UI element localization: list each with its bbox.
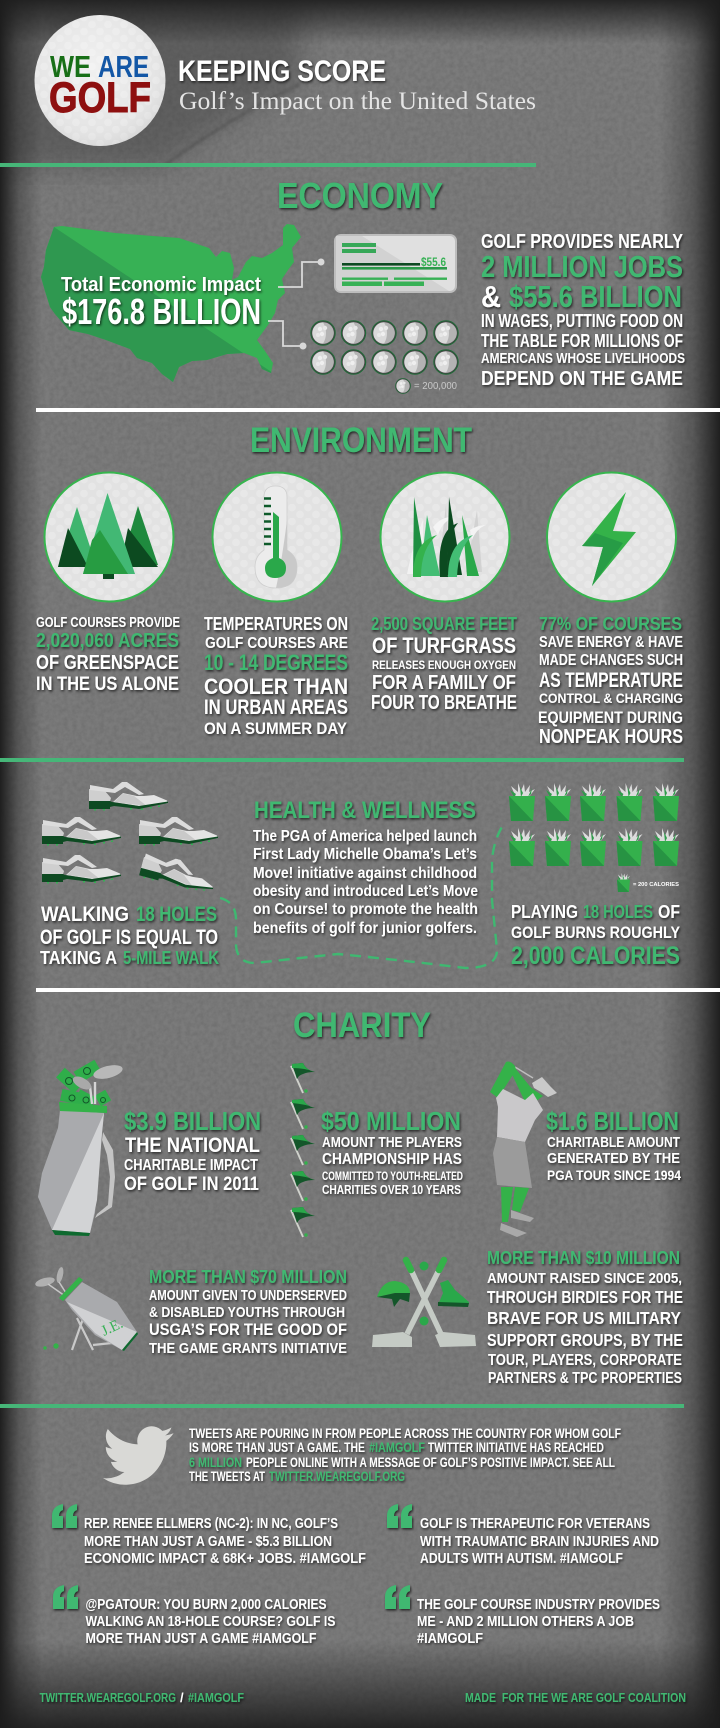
logo: We Are Golf golf ball: GOLF bbox=[49, 74, 151, 122]
icon: paycheck: $55.6 bbox=[421, 255, 446, 269]
icon: pine trees on golf ball bbox=[44, 472, 174, 602]
text block: jobs and wages: $55.6 BILLION bbox=[509, 279, 682, 314]
text block: temperatures: 10 - 14 DEGREES bbox=[204, 650, 348, 675]
text block: let's move: obesity and introduced Let’s Move bbox=[253, 883, 478, 900]
text block: let's move: The PGA of America helped launch bbox=[253, 828, 477, 845]
icon: lightning bolt on golf ball bbox=[547, 472, 676, 602]
text block: 50 million: CHARITIES OVER 10 YEARS bbox=[322, 1183, 461, 1197]
icon: quotation mark 4 bbox=[385, 1585, 410, 1609]
footer: left links: TWITTER.WEAREGOLF.ORG bbox=[40, 1690, 176, 1705]
heading: charity: CHARITY bbox=[293, 1006, 431, 1045]
footer: left links: #IAMGOLF bbox=[188, 1690, 244, 1705]
map: United States with total economic impact: $176.8 BILLION bbox=[62, 291, 261, 332]
icon: golf bag full of money bbox=[38, 1060, 124, 1236]
text block: walking: OF GOLF IS EQUAL TO bbox=[40, 926, 218, 949]
text block: energy savings: SAVE ENERGY & HAVE bbox=[539, 634, 683, 651]
text block: 10 million: BRAVE FOR US MILITARY bbox=[487, 1308, 681, 1328]
text block: energy savings bbox=[538, 614, 683, 748]
panel: environment bbox=[36, 421, 683, 748]
connector dot: paycheck bbox=[318, 258, 324, 266]
heading: economy: ECONOMY bbox=[277, 175, 443, 216]
icon: quotation mark 3 bbox=[53, 1585, 78, 1609]
heading: health and wellness: HEALTH & WELLNESS bbox=[254, 797, 476, 824]
map: United States with total economic impact: Total Economic Impact bbox=[61, 274, 261, 296]
text block: 70 million: AMOUNT GIVEN TO UNDERSERVED bbox=[149, 1287, 347, 1304]
icon group: french fry cups bbox=[509, 783, 679, 866]
text block: tweets intro: 6 MILLION bbox=[189, 1454, 242, 1470]
text block: 3.9 billion: THE NATIONAL bbox=[125, 1134, 260, 1157]
legend: cup equals 200 calories: = 200 CALORIES bbox=[633, 882, 679, 888]
logo: We Are Golf golf ball bbox=[34, 15, 166, 146]
text block: quote veterans bbox=[420, 1516, 659, 1567]
text block: tweets intro: THE TWEETS AT bbox=[189, 1468, 265, 1484]
text block: turfgrass oxygen: 2,500 SQUARE FEET bbox=[371, 614, 517, 634]
icon group: five flags bbox=[291, 1063, 315, 1237]
icon: small golf bag on stand bbox=[34, 1267, 138, 1351]
text block: 70 million: & DISABLED YOUTHS THROUGH bbox=[149, 1304, 345, 1321]
text block: 50 million: COMMITTED TO YOUTH-RELATED bbox=[322, 1171, 463, 1183]
text block: 10 million: PARTNERS & TPC PROPERTIES bbox=[488, 1370, 682, 1387]
text block: tweets intro: TWITTER INITIATIVE HAS REACHED bbox=[428, 1439, 604, 1455]
heading: environment: ENVIRONMENT bbox=[250, 421, 472, 460]
text block: 3.9 billion bbox=[124, 1106, 261, 1195]
text block: temperatures: ON A SUMMER DAY bbox=[204, 719, 348, 738]
text block: let's move: on Course! to promote the health bbox=[253, 901, 478, 918]
text block: temperatures bbox=[204, 614, 348, 738]
text block: 50 million: $50 MILLION bbox=[321, 1106, 461, 1136]
text block: 50 million: CHAMPIONSHIP HAS bbox=[322, 1151, 462, 1168]
text block: walking: 5-MILE WALK bbox=[123, 948, 219, 968]
text block: calories: GOLF BURNS ROUGHLY bbox=[511, 923, 681, 942]
text block: energy savings: CONTROL & CHARGING bbox=[539, 690, 683, 706]
text block: quote veterans: GOLF IS THERAPEUTIC FOR VETERANS bbox=[420, 1516, 650, 1532]
text block: quote Renee Ellmers: ECONOMIC IMPACT & 68K+ JOBS. #IAMGOLF bbox=[84, 1551, 366, 1567]
text block: turfgrass oxygen bbox=[371, 614, 517, 714]
text block: walking bbox=[40, 903, 219, 968]
text block: temperatures: IN URBAN AREAS bbox=[204, 696, 348, 719]
text block: 1.6 billion: $1.6 BILLION bbox=[546, 1106, 679, 1136]
text block: 3.9 billion: $3.9 BILLION bbox=[124, 1106, 261, 1136]
legend: ball equals 200,000: = 200,000 bbox=[414, 381, 457, 392]
text block: let's move: benefits of golf for junior golfers. bbox=[253, 920, 477, 937]
text block: quote golf course industry: ME - AND 2 MILLION OTHERS A JOB bbox=[417, 1614, 634, 1630]
text block: walking: 18 HOLES bbox=[136, 903, 217, 926]
icon: small golf bag on stand: J.E. bbox=[99, 1316, 126, 1340]
text block: 10 million: AMOUNT RAISED SINCE 2005, bbox=[487, 1270, 682, 1287]
map: United States with total economic impact bbox=[30, 224, 301, 390]
text block: quote veterans: ADULTS WITH AUTISM. #IAMGOLF bbox=[420, 1551, 623, 1567]
text block: temperatures: GOLF COURSES ARE bbox=[205, 635, 348, 652]
text block: 1.6 billion: CHARITABLE AMOUNT bbox=[547, 1135, 680, 1151]
icon group: ten golf balls bbox=[311, 321, 458, 374]
title: KEEPING SCORE bbox=[178, 55, 386, 88]
text block: 70 million: MORE THAN $70 MILLION bbox=[149, 1267, 347, 1287]
text block: 3.9 billion: OF GOLF IN 2011 bbox=[124, 1173, 259, 1195]
text block: turfgrass oxygen: FOUR TO BREATHE bbox=[371, 692, 517, 714]
text block: walking: WALKING bbox=[41, 903, 129, 926]
icon: paycheck bbox=[334, 234, 457, 293]
text block: greenspace: OF GREENSPACE bbox=[36, 652, 179, 674]
text block: jobs and wages: 2 MILLION JOBS bbox=[481, 249, 683, 284]
text block: greenspace bbox=[36, 615, 180, 695]
text block: quote PGA Tour: @PGATOUR: YOU BURN 2,000 CALORIES bbox=[86, 1597, 327, 1613]
text block: 70 million: THE GAME GRANTS INITIATIVE bbox=[149, 1340, 347, 1357]
text block: quote PGA Tour: WALKING AN 18-HOLE COURSE? GOLF IS bbox=[86, 1614, 336, 1630]
icon: crossed clubs with helmet and boot bbox=[372, 1260, 476, 1347]
icon: golfer swinging bbox=[490, 1062, 557, 1237]
text block: 10 million: SUPPORT GROUPS, BY THE bbox=[487, 1330, 683, 1350]
text block: energy savings: 77% OF COURSES bbox=[539, 614, 682, 634]
text block: let's move: First Lady Michelle Obama’s Let’s bbox=[253, 846, 477, 863]
text block: 70 million bbox=[149, 1267, 347, 1357]
text block: calories: PLAYING bbox=[511, 902, 578, 922]
connector dot: jobs balls bbox=[300, 342, 306, 350]
text block: quote Renee Ellmers bbox=[84, 1516, 366, 1567]
icon group: golf shoes bbox=[42, 782, 218, 896]
text block: calories: 2,000 CALORIES bbox=[511, 942, 680, 970]
panel: economy bbox=[30, 175, 685, 394]
text block: quote golf course industry: THE GOLF COURSE INDUSTRY PROVIDES bbox=[417, 1597, 660, 1613]
text block: tweets intro bbox=[189, 1425, 621, 1484]
text block: turfgrass oxygen: RELEASES ENOUGH OXYGEN bbox=[372, 658, 516, 672]
icon: twitter bird bbox=[103, 1426, 174, 1485]
dashed connector path bbox=[220, 822, 505, 968]
connector: map to jobs balls bbox=[268, 321, 303, 346]
text block: quote Renee Ellmers: REP. RENEE ELLMERS (NC-2): IN NC, GOLF’S bbox=[84, 1516, 338, 1532]
text block: energy savings: EQUIPMENT DURING bbox=[538, 708, 683, 727]
text block: 3.9 billion: CHARITABLE IMPACT bbox=[124, 1157, 258, 1174]
text block: greenspace: 2,020,060 ACRES bbox=[36, 630, 179, 652]
legend: ball equals 200,000 bbox=[395, 378, 457, 394]
text block: temperatures: TEMPERATURES ON bbox=[204, 614, 348, 634]
panel: twitter bbox=[52, 1425, 660, 1647]
text block: 10 million: TOUR, PLAYERS, CORPORATE bbox=[488, 1352, 682, 1369]
text block: 50 million: AMOUNT THE PLAYERS bbox=[322, 1135, 462, 1151]
text block: 1.6 billion: PGA TOUR SINCE 1994 bbox=[547, 1167, 681, 1183]
text block: 50 million bbox=[321, 1106, 463, 1197]
text block: 10 million bbox=[487, 1248, 683, 1387]
text block: 10 million: MORE THAN $10 MILLION bbox=[487, 1248, 680, 1268]
text block: jobs and wages bbox=[481, 231, 685, 390]
text block: 1.6 billion: GENERATED BY THE bbox=[547, 1151, 680, 1167]
text block: quote golf course industry bbox=[417, 1597, 660, 1647]
text block: quote golf course industry: #IAMGOLF bbox=[417, 1631, 483, 1647]
text block: let's move: Move! initiative against childhood bbox=[253, 865, 477, 882]
text block: turfgrass oxygen: FOR A FAMILY OF bbox=[372, 672, 516, 694]
logo: We Are Golf golf ball: ARE bbox=[98, 49, 149, 84]
text block: calories: OF bbox=[658, 902, 680, 922]
text block: quote PGA Tour: MORE THAN JUST A GAME #IAMGOLF bbox=[86, 1631, 317, 1647]
subtitle: Golf’s Impact on the United States bbox=[179, 88, 536, 115]
text block: tweets intro: #IAMGOLF bbox=[369, 1439, 425, 1455]
text block: quote PGA Tour bbox=[86, 1597, 336, 1647]
icon: quotation mark 2 bbox=[387, 1504, 412, 1528]
text block: turfgrass oxygen: OF TURFGRASS bbox=[372, 633, 516, 658]
text block: jobs and wages: DEPEND ON THE GAME bbox=[481, 368, 683, 390]
text block: 70 million: USGA’S FOR THE GOOD OF bbox=[149, 1321, 347, 1339]
footer: left links: / bbox=[180, 1690, 184, 1705]
text block: walking: TAKING A bbox=[40, 948, 117, 968]
text block: calories: 18 HOLES bbox=[583, 902, 653, 922]
text block: tweets intro: IS MORE THAN JUST A GAME. THE bbox=[189, 1439, 365, 1455]
icon: turfgrass on golf ball bbox=[380, 472, 510, 602]
panel: health and wellness bbox=[40, 782, 681, 970]
text block: quote Renee Ellmers: MORE THAN JUST A GAME - $5.3 BILLION bbox=[84, 1534, 332, 1550]
legend: cup equals 200 calories bbox=[617, 873, 679, 892]
icon: thermometer on golf ball bbox=[212, 472, 342, 602]
text block: calories bbox=[511, 902, 681, 970]
text block: jobs and wages: & bbox=[481, 279, 501, 314]
text block: tweets intro: TWITTER.WEAREGOLF.ORG bbox=[269, 1468, 405, 1484]
logo: We Are Golf golf ball: WE bbox=[50, 49, 91, 84]
text block: greenspace: IN THE US ALONE bbox=[36, 674, 179, 695]
icon: quotation mark 1 bbox=[52, 1504, 77, 1528]
connector: map to paycheck bbox=[278, 262, 319, 287]
text block: energy savings: NONPEAK HOURS bbox=[539, 726, 683, 748]
text block: energy savings: MADE CHANGES SUCH bbox=[539, 652, 683, 669]
text block: 1.6 billion bbox=[546, 1106, 681, 1183]
text block: temperatures: COOLER THAN bbox=[204, 674, 348, 699]
text block: let's move bbox=[253, 828, 478, 937]
text block: greenspace: GOLF COURSES PROVIDE bbox=[36, 615, 180, 631]
panel: charity bbox=[34, 1006, 683, 1387]
text block: quote veterans: WITH TRAUMATIC BRAIN INJURIES AND bbox=[420, 1534, 659, 1550]
